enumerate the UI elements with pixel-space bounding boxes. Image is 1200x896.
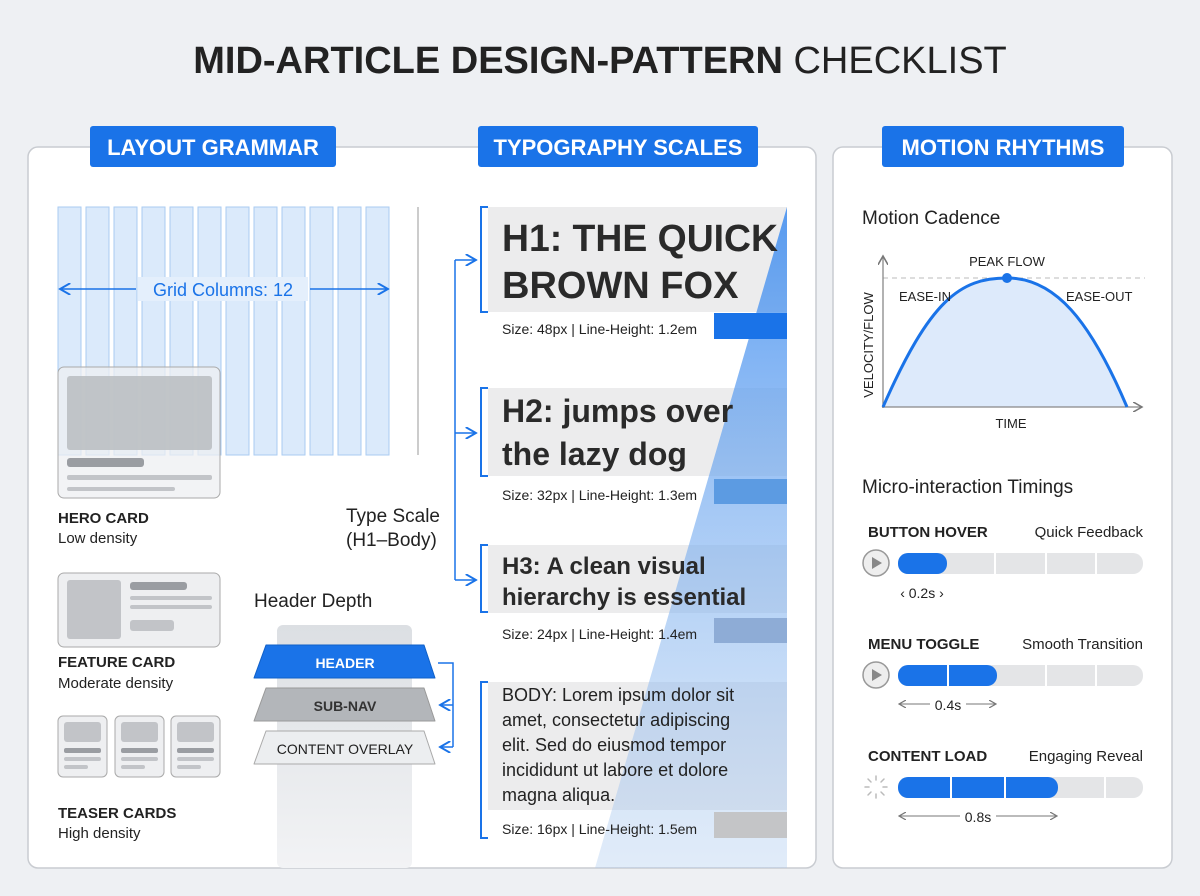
connector arrows [438,260,476,747]
header depth heading: Header Depth [254,591,372,612]
timing: button hover: Quick Feedback [1035,524,1143,541]
body sample: amet, consectetur adipiscing [502,710,730,730]
header depth stack: SUB-NAV [314,698,377,714]
feature card label: Moderate density [58,675,174,692]
motion chart: EASE-OUT [1066,289,1133,304]
H1 sample [502,218,787,339]
timing: content load: 0.8s [965,809,991,825]
timing: menu toggle: MENU TOGGLE [868,636,979,653]
H3 sample: Size: 24px | Line-Height: 1.4em [502,626,697,642]
hero card label: HERO CARD [58,510,149,527]
H2 sample: the lazy dog [502,436,687,472]
timing: content load [865,748,1143,825]
title: MID-ARTICLE DESIGN-PATTERN CHECKLIST [193,40,1007,82]
timing: button hover: BUTTON HOVER [868,524,988,541]
H3 sample: H3: A clean visual [502,553,706,580]
H2 sample: Size: 32px | Line-Height: 1.3em [502,487,697,503]
badge: typography scales [478,126,758,167]
motion chart: VELOCITY/FLOW [861,292,876,398]
type blocks background [488,207,787,810]
header depth stack [254,625,435,868]
motion cadence heading: Motion Cadence [862,208,1000,229]
type scale label: (H1–Body) [346,530,437,551]
teaser cards [58,716,220,777]
teaser cards label [58,805,176,842]
body sample: magna aliqua. [502,785,615,805]
timing: button hover: ‹ 0.2s › [900,585,944,601]
body sample: elit. Sed do eiusmod tempor [502,735,726,755]
type scale label: Type Scale [346,506,440,527]
badge: layout grammar: LAYOUT GRAMMAR [107,135,319,160]
header depth stack: HEADER [315,655,375,671]
type scale label [346,506,440,551]
teaser cards label: High density [58,825,141,842]
blue triangle [595,207,787,868]
motion chart: EASE-IN [899,289,951,304]
motion chart: TIME [995,416,1027,431]
H1 sample: BROWN FOX [502,265,739,307]
hero card [58,367,220,498]
timing: menu toggle [863,636,1143,713]
hero card label [58,510,149,547]
timing: content load: CONTENT LOAD [868,748,987,765]
body sample: incididunt ut labore et dolore [502,760,728,780]
H3 sample: hierarchy is essential [502,584,746,611]
H1 sample: H1: THE QUICK [502,218,779,260]
header depth stack: CONTENT OVERLAY [277,741,414,757]
timing: menu toggle: 0.4s [935,697,961,713]
badge: motion rhythms [882,126,1124,167]
H2 sample [502,393,787,504]
hero card label: Low density [58,530,138,547]
motion chart: PEAK FLOW [969,254,1046,269]
H1 sample: Size: 48px | Line-Height: 1.2em [502,321,697,337]
feature card [58,573,220,647]
timing: content load: Engaging Reveal [1029,748,1143,765]
micro-interaction heading: Micro-interaction Timings [862,477,1073,498]
panel: left (layout + typography) [28,147,816,868]
grid columns label: Grid Columns: 12 [153,280,293,300]
H2 sample: H2: jumps over [502,393,733,429]
motion chart [861,254,1145,431]
brackets [481,207,488,838]
body sample: Size: 16px | Line-Height: 1.5em [502,821,697,837]
body sample: BODY: Lorem ipsum dolor sit [502,685,734,705]
feature card label [58,654,175,692]
feature card label: FEATURE CARD [58,654,175,671]
teaser cards label: TEASER CARDS [58,805,176,822]
timing: button hover [863,524,1143,601]
badge: typography scales: TYPOGRAPHY SCALES [494,135,742,160]
grid columns [58,207,389,455]
badge: layout grammar [90,126,336,167]
badge: motion rhythms: MOTION RHYTHMS [902,135,1104,160]
H3 sample [502,553,787,643]
grid columns label [60,277,388,301]
timing: menu toggle: Smooth Transition [1022,636,1143,653]
panel: motion rhythms [833,147,1172,868]
body sample [502,685,787,838]
